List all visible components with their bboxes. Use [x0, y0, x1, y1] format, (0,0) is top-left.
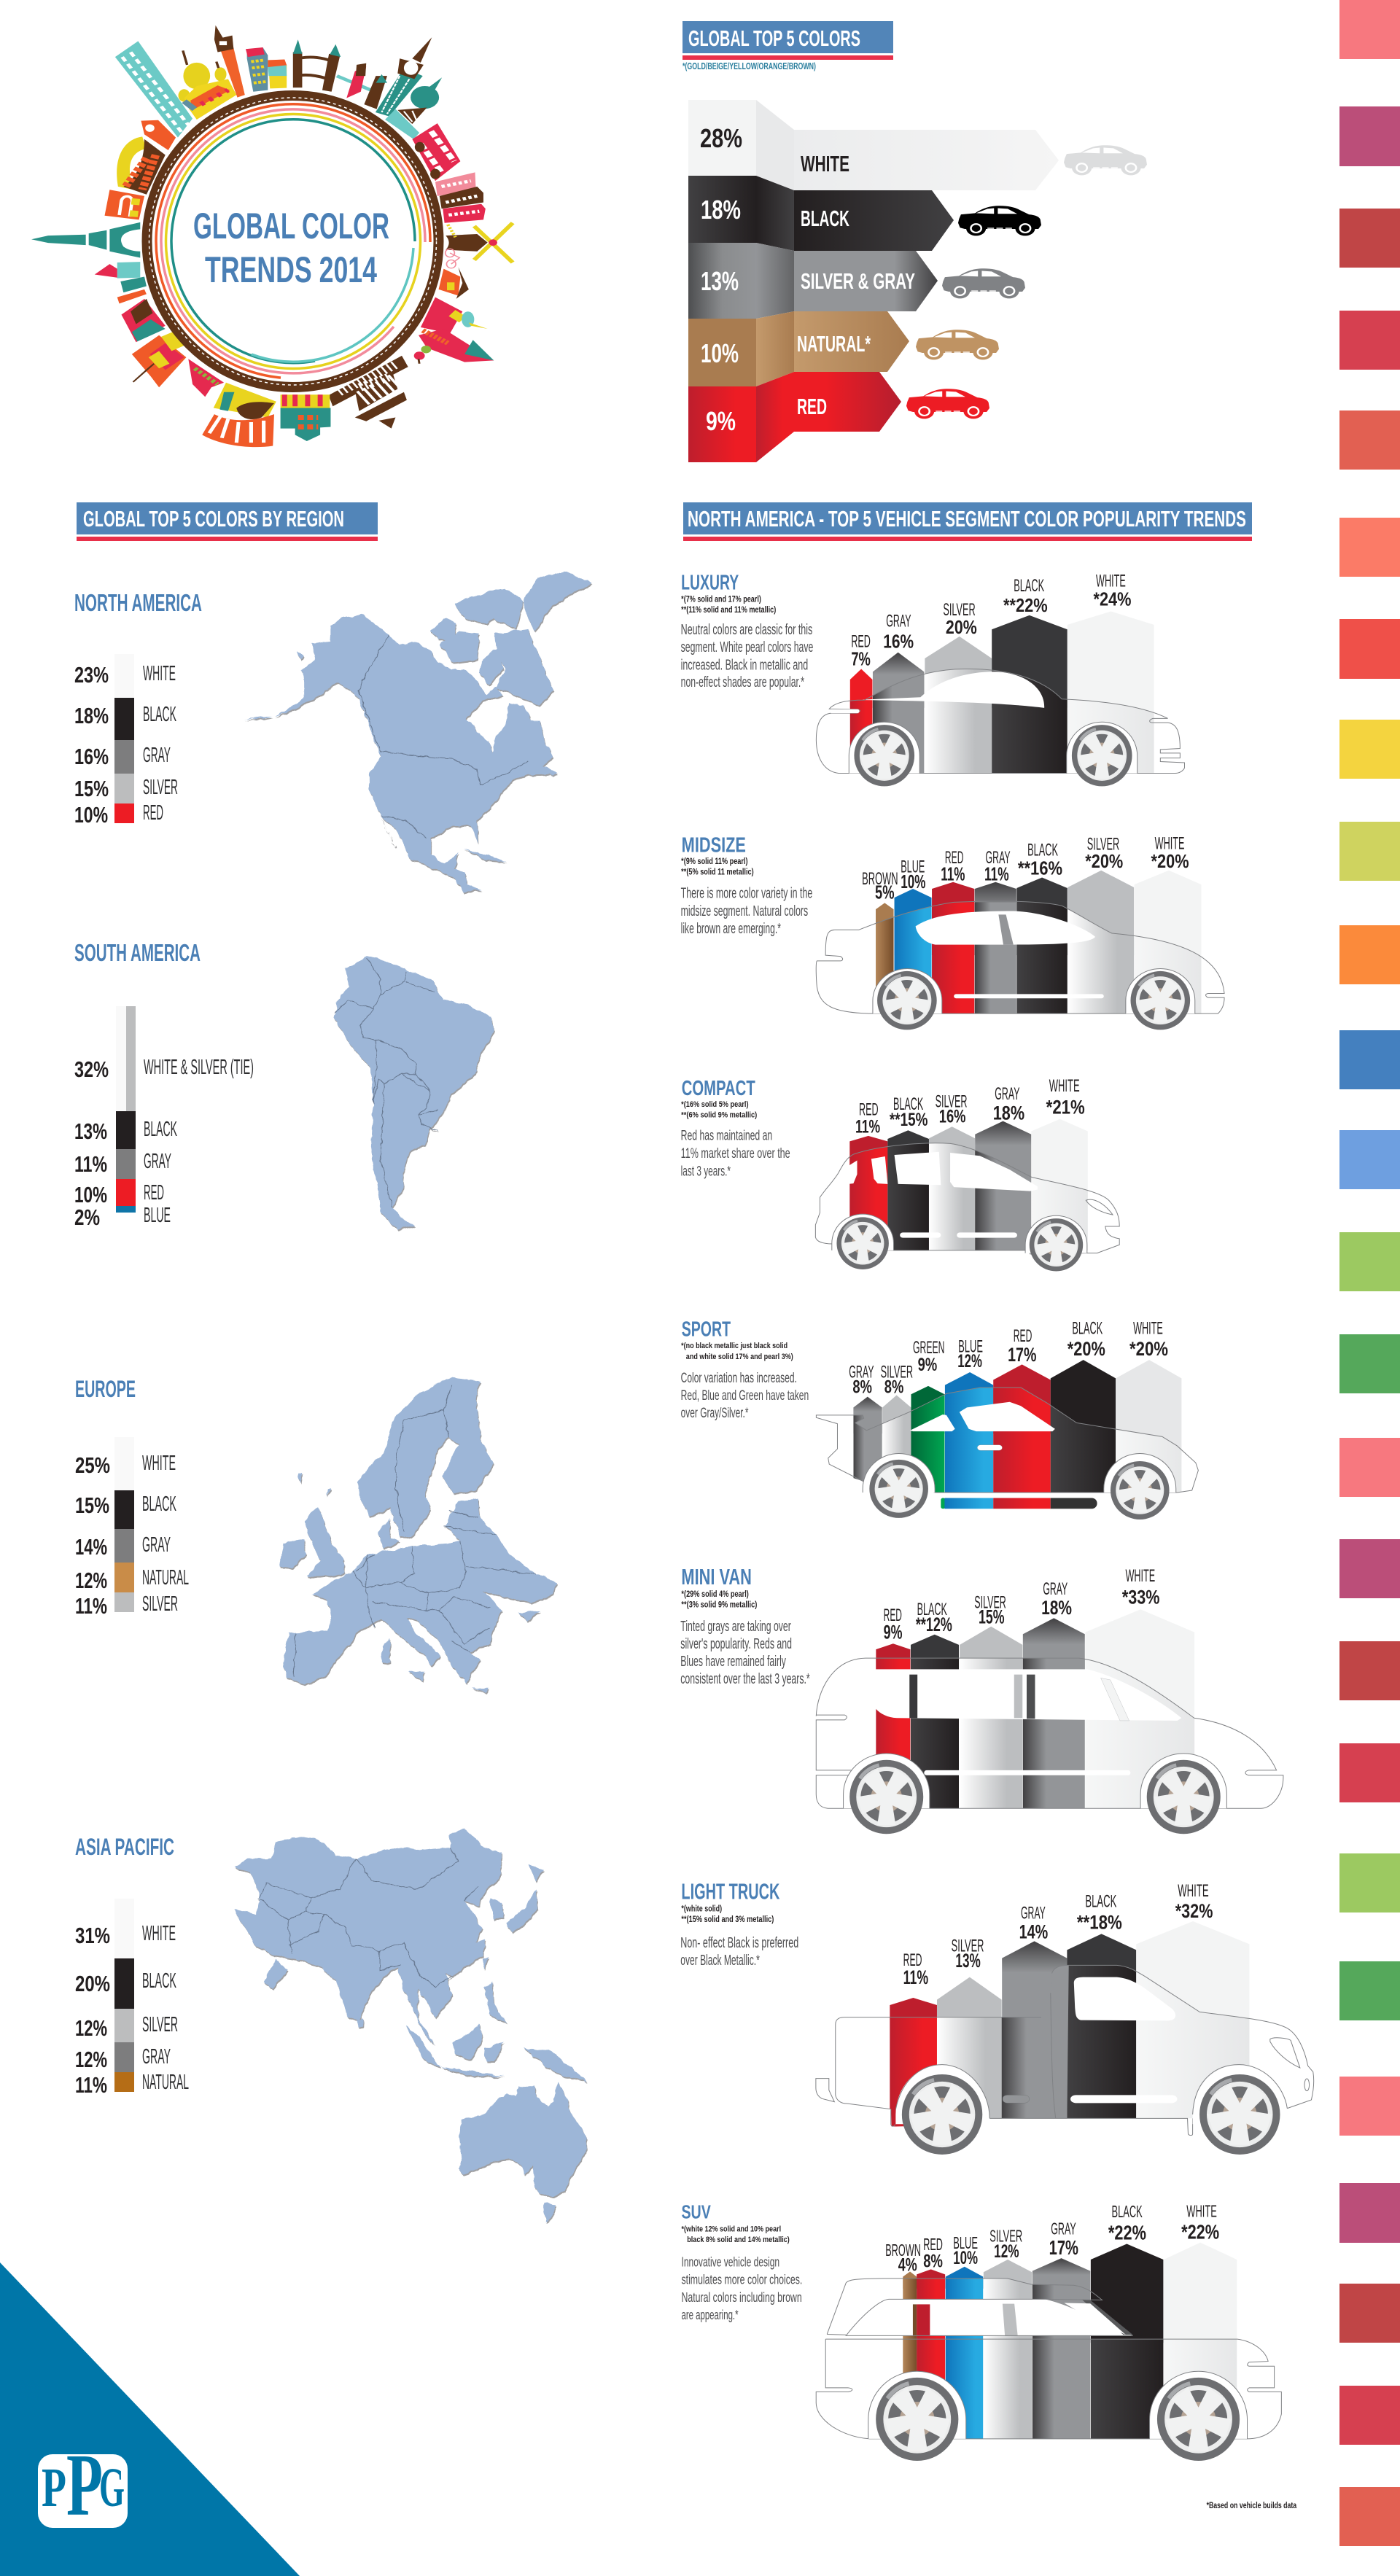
- labels: mini van values: WHITE: [1125, 1566, 1155, 1586]
- panel: south america: [74, 939, 494, 1230]
- legend names: asia pacific: WHITE: [142, 1922, 176, 1945]
- labels: sport values: GRAY: [849, 1362, 874, 1382]
- panel: suv segment: *22%: [1181, 2221, 1219, 2244]
- icon: townhouses: [246, 47, 287, 92]
- labels: light truck values: **18%: [1077, 1912, 1122, 1933]
- text: compact description: 11% market share over the: [681, 1145, 790, 1161]
- panel: suv segment: stimulates more color choices.: [681, 2273, 802, 2287]
- labels: midsize values: GRAY: [986, 849, 1011, 868]
- labels: mini van values: [884, 1566, 1160, 1643]
- map: europe: [280, 1377, 557, 1693]
- labels: suv values: 17%: [1049, 2236, 1078, 2260]
- panel: global top 5 colors: [682, 21, 1147, 462]
- illustration: midsize car: [816, 901, 1224, 1030]
- chart: suv color bars: [903, 2243, 1237, 2439]
- labels: suv values: RED: [923, 2235, 943, 2254]
- logo: PPG: P: [66, 2436, 103, 2534]
- labels: compact values: GRAY: [995, 1084, 1020, 1104]
- labels: luxury values: RED: [851, 632, 871, 651]
- chart: natural 10%: NATURAL*: [797, 331, 871, 357]
- labels: compact values: *21%: [1046, 1097, 1085, 1118]
- labels: light truck values: BLACK: [1085, 1892, 1116, 1911]
- legend values: europe: [75, 1452, 110, 1619]
- text: luxury description: **(11% solid and 11% metallic): [681, 604, 776, 615]
- chart and truck illustration: [816, 1921, 1314, 2155]
- legend values: north america: 18%: [74, 703, 109, 728]
- icon: canal houses: [435, 172, 486, 223]
- road ring: [147, 96, 439, 387]
- labels: midsize values: **16%: [1018, 857, 1062, 879]
- text: light truck description: over Black Metallic.*: [680, 1952, 760, 1969]
- illustration: light truck: [816, 1965, 1314, 2155]
- illustration: suv: [816, 2279, 1281, 2461]
- labels: compact values: 11%: [855, 1116, 880, 1137]
- labels: sport values: [849, 1318, 1168, 1397]
- labels: compact values: 16%: [939, 1106, 965, 1126]
- icon: campanile: [214, 26, 245, 98]
- chart: black 18%: 18%: [701, 195, 741, 225]
- labels: light truck values: [903, 1881, 1213, 1988]
- heading: europe: EUROPE: [75, 1376, 136, 1402]
- labels: light truck values: *32%: [1175, 1900, 1213, 1922]
- text: light truck description: *(white solid): [681, 1904, 722, 1913]
- labels: sport values: GREEN: [913, 1337, 944, 1357]
- legend names: asia pacific: SILVER: [142, 2013, 178, 2036]
- labels: suv values: 10%: [953, 2247, 978, 2268]
- chart: mini van color bars: [876, 1609, 1194, 1808]
- icon: orange temple: [105, 190, 144, 219]
- labels: compact values: SILVER: [936, 1092, 968, 1111]
- labels: suv values: GRAY: [1051, 2219, 1076, 2238]
- chart: silver and gray 13%: 13%: [701, 266, 739, 296]
- labels: luxury values: 7%: [851, 648, 871, 670]
- panel: suv segment: WHITE: [1186, 2201, 1217, 2220]
- labels: compact values: RED: [859, 1100, 879, 1119]
- chart: compact color bars: [849, 1119, 1088, 1250]
- labels: mini van values: 18%: [1041, 1597, 1072, 1619]
- legend values: south america: 13%: [74, 1118, 107, 1144]
- icon: clock tower: [376, 37, 432, 117]
- labels: luxury values: [851, 572, 1132, 670]
- labels: sport values: RED: [1014, 1326, 1032, 1345]
- legend names: north america: GRAY: [143, 744, 171, 767]
- labels: compact values: [855, 1076, 1085, 1137]
- labels: luxury values: GRAY: [886, 612, 911, 631]
- legend values: europe: 11%: [75, 1593, 107, 1619]
- illustration: sport car: [816, 1388, 1198, 1519]
- labels: midsize values: BLUE: [901, 857, 925, 877]
- legend values: north america: 15%: [74, 776, 109, 801]
- labels: suv values: BROWN: [885, 2241, 921, 2260]
- icon: red and teal house: [121, 299, 166, 342]
- text: sport description: *(no black metallic just black solid: [681, 1341, 788, 1350]
- legend values: north america: 16%: [74, 744, 109, 769]
- text: midsize description: There is more color variety in the: [681, 885, 812, 901]
- labels: luxury values: WHITE: [1096, 572, 1126, 591]
- legend values: south america: 32%: [74, 1057, 109, 1082]
- labels: luxury values: **22%: [1003, 595, 1048, 616]
- icon: trees: [414, 346, 431, 364]
- text: suv description: black 8% solid and 14% metallic): [687, 2235, 790, 2244]
- text: compact description: *(16% solid 5% pearl): [681, 1100, 749, 1109]
- text: mini van description: Blues have remained fairly: [680, 1653, 786, 1670]
- legend names: europe: SILVER: [142, 1592, 178, 1616]
- legend names: europe: WHITE: [142, 1452, 176, 1475]
- text: sport description: and white solid 17% and pearl 3%): [686, 1352, 793, 1361]
- labels: sport values: WHITE: [1133, 1318, 1163, 1338]
- panel: luxury segment: [681, 571, 1184, 786]
- legend values: europe: 12%: [75, 1568, 107, 1593]
- map: south america: [334, 956, 494, 1230]
- labels: midsize values: 11%: [941, 863, 965, 884]
- labels: midsize values: *20%: [1085, 851, 1123, 872]
- text: midsize description: [681, 833, 812, 937]
- chart: white 28%: WHITE: [801, 151, 849, 176]
- labels: suv values: 4%: [898, 2254, 917, 2275]
- labels: sport values: 12%: [957, 1350, 982, 1371]
- text: compact description: Red has maintained an: [681, 1126, 772, 1143]
- text: compact description: COMPACT: [682, 1076, 755, 1100]
- labels: compact values: BLACK: [893, 1094, 923, 1113]
- icon: bicycle: [446, 249, 459, 268]
- labels: midsize values: *20%: [1151, 851, 1189, 872]
- labels: suv values: BLACK: [1111, 2202, 1143, 2221]
- map: asia pacific: [234, 1828, 588, 2082]
- text: light truck description: LIGHT TRUCK: [681, 1879, 779, 1904]
- labels: mini van values: **12%: [916, 1614, 952, 1635]
- text: mini van description: *(29% solid 4% pearl): [681, 1589, 749, 1599]
- labels: sport values: *20%: [1068, 1338, 1105, 1360]
- chart: black 18%: BLACK: [801, 206, 849, 231]
- text: midsize description: midsize segment. Natural colors: [681, 903, 808, 919]
- legend names: north america: RED: [143, 801, 163, 825]
- text: mini van description: **(3% solid 9% metallic): [681, 1600, 757, 1609]
- text: sport description: [681, 1318, 809, 1421]
- legend values: south america: 2%: [74, 1205, 100, 1230]
- labels: compact values: 18%: [993, 1102, 1024, 1124]
- icon: leaning tower: [115, 41, 192, 138]
- labels: suv values: SILVER: [989, 2226, 1022, 2246]
- legend names: south america: BLACK: [144, 1118, 177, 1141]
- panel: compact segment: [681, 1076, 1119, 1271]
- labels: mini van values: 9%: [884, 1622, 903, 1643]
- labels: mini van values: GRAY: [1043, 1579, 1068, 1599]
- text: compact description: [681, 1076, 790, 1179]
- title: TRENDS 2014: [205, 249, 377, 290]
- chart: midsize color bars: [876, 871, 1201, 1013]
- chart: red 9%: RED: [797, 394, 827, 419]
- labels: light truck values: SILVER: [952, 1936, 984, 1956]
- text: mini van description: [680, 1565, 810, 1687]
- labels: sport values: BLACK: [1072, 1318, 1102, 1338]
- legend values: south america: 10%: [74, 1182, 107, 1207]
- labels: compact values: **15%: [890, 1109, 928, 1129]
- labels: light truck values: 11%: [903, 1966, 928, 1988]
- labels: light truck values: RED: [903, 1950, 922, 1970]
- labels: luxury values: BLACK: [1014, 576, 1044, 596]
- labels: mini van values: BLACK: [917, 1600, 947, 1619]
- chart: white 28%: [688, 100, 1147, 190]
- text: mini van description: silver's popularity. Reds and: [680, 1635, 792, 1652]
- labels: midsize values: BROWN: [862, 870, 898, 889]
- legend names: europe: BLACK: [142, 1493, 176, 1516]
- legend names: north america: [143, 662, 178, 825]
- legend names: europe: [142, 1452, 189, 1616]
- labels: light truck values: GRAY: [1021, 1903, 1046, 1923]
- labels: compact values: WHITE: [1049, 1076, 1080, 1096]
- labels: mini van values: SILVER: [974, 1593, 1006, 1612]
- text: luxury description: [681, 571, 813, 690]
- icon: orange houses: [132, 329, 186, 387]
- text: midsize description: **(5% solid 11 metallic): [681, 867, 754, 877]
- legend values: asia pacific: 20%: [75, 1971, 110, 1996]
- panel: north america: [74, 572, 592, 892]
- chart: luxury color bars: [850, 611, 1154, 773]
- illustration: mini van: [816, 1658, 1283, 1834]
- labels: light truck values: 14%: [1019, 1921, 1048, 1942]
- legend names: south america: GRAY: [144, 1150, 171, 1173]
- panel: europe: NATURAL: [142, 1566, 189, 1589]
- icon: columned building: [329, 356, 408, 429]
- legend names: north america: WHITE: [143, 662, 176, 685]
- chart: silver and gray 13%: [688, 243, 1025, 319]
- text: suv description: SUV: [681, 2201, 711, 2222]
- labels: suv values: *22%: [1108, 2222, 1146, 2244]
- text: light truck description: Non- effect Black is preferred: [680, 1934, 798, 1951]
- legend names: asia pacific: BLACK: [142, 1969, 176, 1993]
- labels: midsize values: 11%: [984, 863, 1009, 884]
- text: luxury description: Neutral colors are classic for this: [681, 621, 812, 638]
- labels: sport values: 17%: [1008, 1345, 1036, 1366]
- text: sport description: Red, Blue and Green have taken: [681, 1387, 809, 1404]
- labels: sport values: 8%: [884, 1377, 903, 1397]
- hero: city skyline ring: [31, 26, 513, 447]
- legend values: europe: 15%: [75, 1493, 109, 1518]
- chart: silver and gray 13%: SILVER & GRAY: [801, 268, 915, 294]
- panel: suv segment: [681, 2201, 1297, 2510]
- side skirt color strip: [941, 1498, 1097, 1509]
- panel: mini van segment: [680, 1565, 1283, 1834]
- panel: light truck segment: [680, 1879, 1314, 2155]
- panel: sport segment: [681, 1318, 1198, 1519]
- stacked color bar: europe: [114, 1437, 134, 1612]
- icon: double decker bus: [412, 123, 460, 181]
- labels: midsize values: SILVER: [1087, 835, 1119, 855]
- legend names: south america: BLUE: [144, 1204, 171, 1227]
- panel: midsize segment: [681, 833, 1224, 1030]
- panel: asia pacific: NATURAL: [142, 2071, 189, 2094]
- panel: asia pacific: [75, 1828, 588, 2222]
- heading: global top 5 colors by region: GLOBAL TOP 5 COLORS BY REGION: [83, 506, 344, 532]
- icon: ornate church: [281, 394, 330, 441]
- legend values: south america: 11%: [74, 1151, 107, 1177]
- labels: sport values: *20%: [1129, 1338, 1168, 1360]
- legend names: north america: BLACK: [143, 703, 176, 726]
- labels: light truck values: 13%: [955, 1950, 981, 1972]
- map: north america: [245, 572, 592, 892]
- legend names: south america: [144, 1056, 254, 1227]
- labels: midsize values: WHITE: [1155, 834, 1184, 854]
- legend values: asia pacific: [75, 1923, 110, 2098]
- chart: sport color bars: [853, 1360, 1181, 1493]
- legend values: asia pacific: 31%: [75, 1923, 110, 1948]
- labels: sport values: 9%: [918, 1354, 937, 1374]
- text: sport description: SPORT: [682, 1318, 731, 1341]
- legend values: north america: [74, 662, 109, 828]
- map: australia: [459, 2082, 587, 2222]
- chart: red 9%: [688, 372, 989, 462]
- text: mini van description: consistent over the last 3 years.*: [680, 1670, 810, 1687]
- icon: eiffel tower: [31, 222, 140, 257]
- text: luxury description: *(7% solid and 17% pearl): [681, 594, 761, 604]
- legend values: south america: [74, 1057, 109, 1230]
- icon: colosseum: [117, 136, 166, 195]
- text: luxury description: non-effect shades are popular.*: [681, 674, 804, 690]
- corner triangle: [0, 2262, 300, 2576]
- labels: luxury values: SILVER: [943, 600, 976, 620]
- title: GLOBAL COLOR: [193, 206, 389, 246]
- heading: north america vehicle segment trends: [683, 502, 1252, 541]
- icon: domed cathedral: [179, 50, 236, 120]
- labels: mini van values: RED: [884, 1606, 902, 1625]
- labels: luxury values: 16%: [883, 631, 914, 652]
- legend names: asia pacific: [142, 1922, 189, 2094]
- text: compact description: **(6% solid 9% metallic): [681, 1110, 757, 1119]
- icon: kremlin cathedral: [419, 297, 494, 362]
- text: compact description: last 3 years.*: [681, 1163, 731, 1179]
- text: light truck description: **(15% solid and 3% metallic): [681, 1915, 774, 1924]
- text: midsize description: *(9% solid 11% pearl): [681, 856, 748, 866]
- labels: light truck values: WHITE: [1178, 1881, 1209, 1901]
- chart: light truck color bars: [890, 1921, 1249, 2127]
- panel: south america: WHITE & SILVER (TIE): [144, 1056, 254, 1079]
- labels: midsize values: 5%: [875, 882, 895, 903]
- heading: south america: SOUTH AMERICA: [74, 939, 201, 966]
- labels: luxury values: *24%: [1093, 588, 1132, 610]
- legend values: asia pacific: 12%: [75, 2015, 107, 2041]
- text: luxury description: segment. White pearl colors have: [681, 639, 813, 655]
- labels: sport values: SILVER: [881, 1362, 913, 1382]
- labels: mini van values: *33%: [1122, 1587, 1160, 1608]
- text: sport description: over Gray/Silver.*: [681, 1404, 749, 1421]
- icon: orange gabled house: [141, 120, 176, 150]
- logo: PPG: [38, 2436, 128, 2534]
- labels: midsize values: 10%: [901, 871, 925, 892]
- text: sport description: Color variation has increased.: [681, 1369, 797, 1385]
- stacked color bar: north america: [114, 654, 134, 823]
- icon: windmill: [446, 223, 513, 262]
- labels: suv values: BLUE: [953, 2233, 978, 2252]
- panel: suv segment: Innovative vehicle design: [681, 2254, 779, 2270]
- illustration: compact car: [815, 1143, 1119, 1271]
- illustration: luxury car: [816, 669, 1184, 786]
- legend names: south america: RED: [144, 1181, 164, 1205]
- heading: asia pacific: ASIA PACIFIC: [75, 1834, 174, 1860]
- legend names: asia pacific: GRAY: [142, 2045, 171, 2069]
- chart: natural 10%: [688, 311, 999, 386]
- legend values: asia pacific: 11%: [75, 2072, 107, 2098]
- legend values: asia pacific: 12%: [75, 2047, 107, 2072]
- heading: global top 5 colors by region: [77, 502, 378, 541]
- text: mini van description: MINI VAN: [681, 1565, 752, 1589]
- legend values: north america: 10%: [74, 802, 108, 828]
- text: mini van description: Tinted grays are taking over: [680, 1618, 791, 1635]
- labels: suv values: [885, 2201, 1219, 2275]
- labels: suv values: 8%: [923, 2251, 943, 2271]
- color swatch column: [1339, 0, 1400, 2546]
- icon: wooden hut: [439, 267, 469, 299]
- icon: tower bridge: [293, 39, 375, 92]
- icon: small teal and red houses: [95, 262, 147, 303]
- text: luxury description: LUXURY: [681, 571, 739, 594]
- legend values: europe: 25%: [75, 1452, 110, 1478]
- icon: domed hall and bridge: [385, 77, 442, 139]
- chart: white 28%: 28%: [700, 123, 742, 153]
- legend names: europe: GRAY: [142, 1533, 171, 1557]
- icon: lipstick tower and small tower: [346, 63, 387, 109]
- text: suv description: [681, 2201, 802, 2322]
- legend values: north america: 23%: [74, 662, 109, 688]
- labels: suv values: 12%: [994, 2241, 1019, 2262]
- legend values: europe: 14%: [75, 1534, 107, 1560]
- labels: midsize values: [862, 834, 1189, 903]
- text: midsize description: like brown are emerging.*: [681, 921, 781, 937]
- logo: PPG: G: [99, 2457, 125, 2518]
- city buildings around the ring: [31, 26, 513, 447]
- labels: sport values: BLUE: [958, 1336, 983, 1356]
- chart: natural 10%: 10%: [701, 338, 739, 368]
- icon: folk ornament: [188, 359, 224, 397]
- stacked color bar: south america: [116, 1006, 136, 1213]
- heading: global top 5 colors: GLOBAL TOP 5 COLORS: [688, 26, 860, 51]
- labels: sport values: 8%: [852, 1377, 872, 1397]
- panel: suv segment: Natural colors including brown: [681, 2290, 802, 2305]
- title: [193, 206, 389, 290]
- colored circular arcs: [156, 104, 430, 378]
- text: midsize description: MIDSIZE: [682, 833, 746, 857]
- labels: midsize values: RED: [945, 849, 963, 868]
- text: luxury description: increased. Black in metallic and: [681, 657, 808, 673]
- labels: midsize values: BLACK: [1027, 841, 1058, 860]
- chart: red 9%: 9%: [706, 406, 736, 436]
- text: suv description: *(white 12% solid and 10% pearl: [681, 2225, 781, 2234]
- text: suv description: are appearing.*: [681, 2308, 739, 2322]
- labels: mini van values: 15%: [979, 1606, 1005, 1627]
- heading: global top 5 colors: [682, 21, 893, 71]
- labels: luxury values: 20%: [946, 617, 977, 638]
- text: light truck description: [680, 1879, 798, 1969]
- heading: global top 5 colors: *(GOLD/BEIGE/YELLOW/ORANGE/BROWN): [682, 61, 816, 71]
- logo: PPG: P: [42, 2457, 66, 2518]
- panel: europe: [75, 1376, 557, 1693]
- chart: black 18%: [688, 176, 1041, 251]
- panel: north america: SILVER: [143, 776, 178, 799]
- heading: north america: NORTH AMERICA: [74, 589, 202, 616]
- stacked color bar: asia pacific: [114, 1899, 134, 2092]
- icon: bullfight arena: [202, 383, 276, 447]
